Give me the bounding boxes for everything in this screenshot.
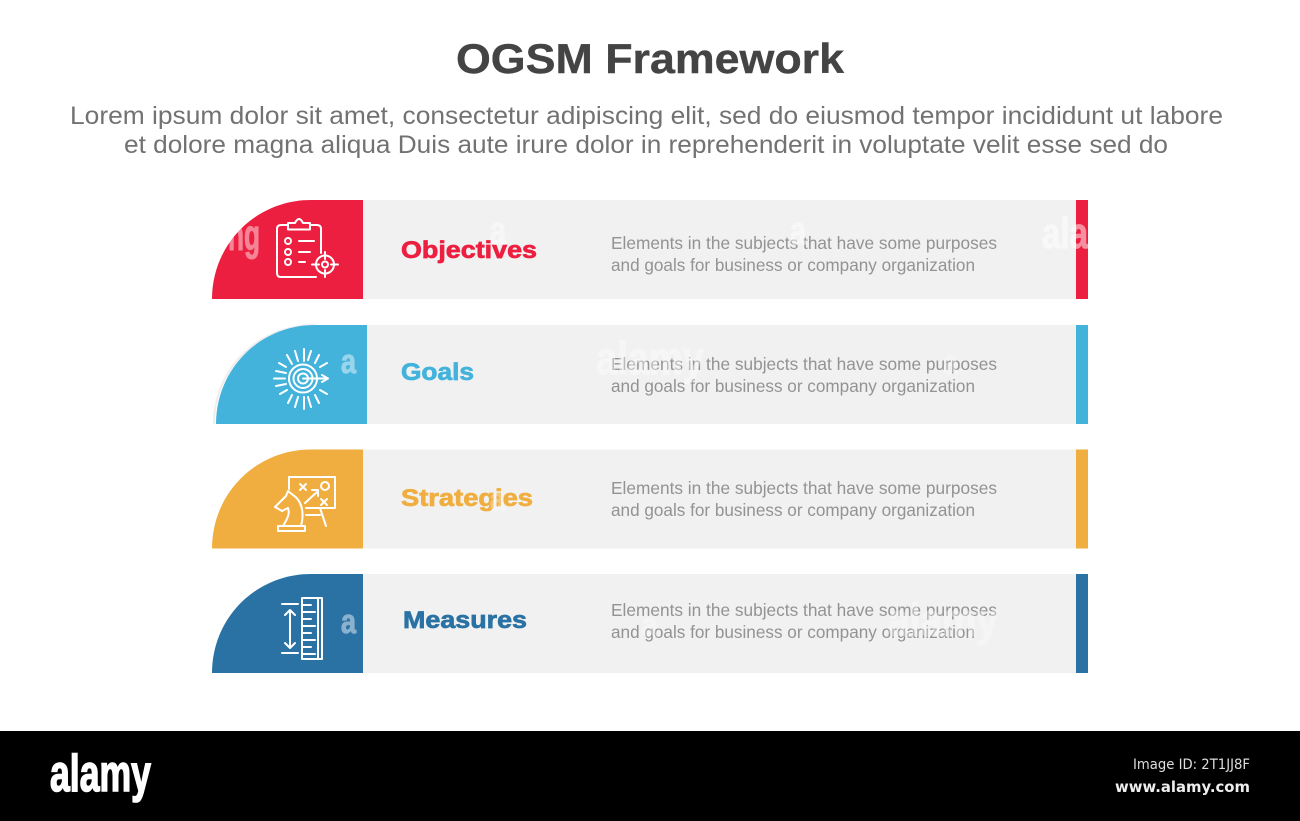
icon: clipboard with target [277,219,338,277]
accent bar: goals [1076,325,1088,424]
quarter round: strategies [212,450,363,548]
panel: objectives [212,200,1088,299]
watermarks: a [490,209,507,253]
label: measures: Measures [403,607,527,634]
watermarks: a [341,343,357,381]
description: goals: and goals for business or company organization [611,376,975,396]
watermarks: ng [228,211,260,260]
description: strategies [611,478,997,520]
watermarks: a [790,209,807,253]
title: OGSM Framework [456,35,845,82]
description: objectives [611,233,997,275]
description: objectives: Elements in the subjects that have some purposes [611,233,997,253]
description: measures: Elements in the subjects that have some purposes [611,600,997,620]
icon: chess knight and board [275,477,335,531]
label: strategies: Strategies [401,485,533,512]
footer band [0,731,1300,821]
quarter round: measures [212,574,363,673]
subtitle text block: et dolore magna aliqua Duis aute irure dolor in reprehenderit in voluptate velit esse sed do [124,131,1168,159]
panel: measures [212,574,1088,673]
icon: ruler with height arrow [282,598,322,659]
quarter round: objectives [212,200,363,299]
watermarks [228,209,1088,646]
watermarks: alamy [888,594,998,646]
label: goals: Goals [401,359,474,386]
subtitle text block: Lorem ipsum dolor sit amet, consectetur adipiscing elit, sed do eiusmod tempor incididunt ut labore [70,102,1223,130]
watermarks: a [642,606,658,644]
subtitle text block [70,102,1223,159]
description: measures: and goals for business or company organization [611,622,975,642]
accent bar: strategies [1076,450,1088,548]
panel: strategies [212,450,1088,548]
watermarks: a [490,481,505,517]
watermarks: a [341,603,357,641]
accent bar: measures [1076,574,1088,673]
description: objectives: and goals for business or company organization [611,255,975,275]
watermarks: ala [1042,209,1088,258]
website: www.alamy.com [1115,778,1250,796]
panel: goals [214,325,1088,424]
label: objectives: Objectives [401,237,537,264]
icon: target with rays [274,349,328,409]
watermarks: a [943,344,959,382]
description: goals: Elements in the subjects that have some purposes [611,354,997,374]
description: strategies: and goals for business or company organization [611,500,975,520]
watermarks: alamy [596,332,704,384]
description: measures [611,600,997,642]
quarter round: goals [214,325,367,424]
image id: Image ID: 2T1JJ8F [1133,757,1250,773]
footer logo: alamy [50,745,151,803]
accent bar: objectives [1076,200,1088,299]
description: goals [611,354,997,396]
description: strategies: Elements in the subjects that have some purposes [611,478,997,498]
